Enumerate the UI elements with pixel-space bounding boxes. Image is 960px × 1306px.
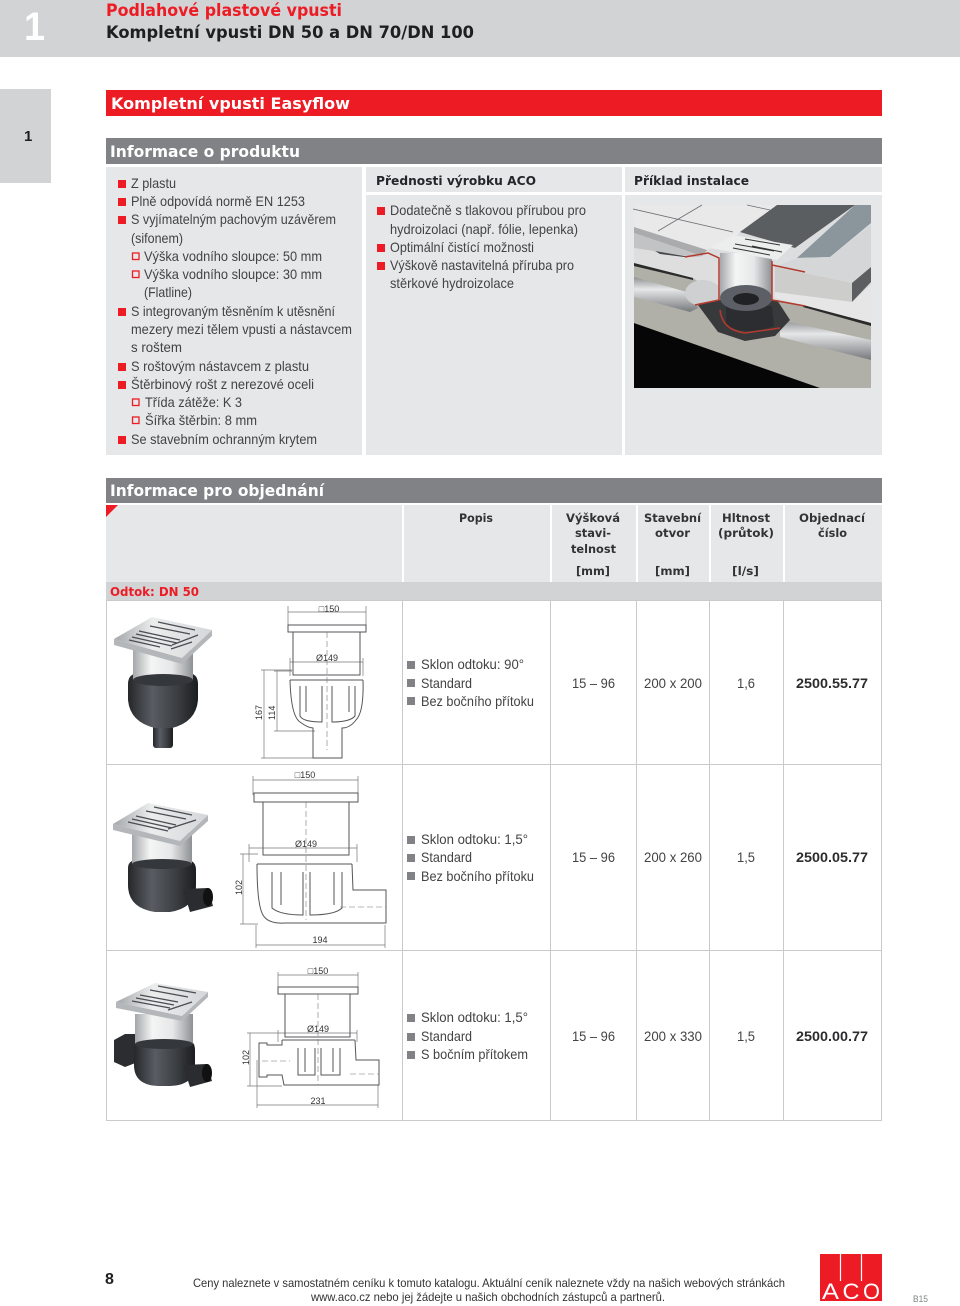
- side tab: [0, 89, 51, 183]
- row 2 description: Bez bočního přítoku: [421, 868, 534, 884]
- row 1 description: Bez bočního přítoku: [421, 693, 534, 709]
- technical drawing 1: 114: [267, 706, 277, 720]
- panel: ACO advantages: Výškově nastavitelná příruba pro: [390, 257, 574, 273]
- panel: ACO advantages: hydroizolaci (např. fólie, lepenka): [390, 221, 578, 237]
- technical drawing 3: [241, 966, 379, 1108]
- row 1 values: 1,6: [737, 675, 755, 691]
- technical drawing 3: 102: [241, 1050, 251, 1065]
- row 2 description: [407, 831, 534, 884]
- ACO logo: [820, 1254, 882, 1304]
- product photo 3: [114, 983, 212, 1087]
- row 1 values: 2500.55.77: [796, 675, 868, 691]
- order table header: Objednací: [799, 511, 866, 525]
- panel: ACO advantages: Dodatečně s tlakovou přírubou pro: [390, 202, 586, 218]
- footer note: Ceny naleznete v samostatném ceníku k tomuto katalogu. Aktuální ceník naleznete vždy na našich webových stránkách: [193, 1276, 785, 1290]
- row 2 values: 2500.05.77: [796, 849, 868, 865]
- panel: product features: (sifonem): [131, 230, 183, 246]
- panel: ACO advantages: [366, 167, 622, 455]
- order table header: Stavební: [644, 511, 702, 525]
- installation illustration: [633, 205, 871, 388]
- row 2 description: Sklon odtoku: 1,5°: [421, 831, 528, 847]
- row 3 values: 200 x 330: [644, 1028, 702, 1044]
- panel: product features: Z plastu: [131, 175, 176, 191]
- order info heading: [106, 478, 882, 503]
- row 3 values: [572, 1028, 868, 1044]
- technical drawing 3: 231: [310, 1096, 326, 1106]
- red corner marker: [106, 505, 118, 517]
- row 3 values: 15 – 96: [572, 1028, 615, 1044]
- row 3 values: 1,5: [737, 1028, 755, 1044]
- row 3 description: Standard: [421, 1028, 472, 1044]
- panel: product features: S integrovaným těsněním k utěsnění: [131, 303, 335, 319]
- order table header: [l/s]: [732, 564, 759, 578]
- technical drawing 2: 102: [234, 880, 244, 895]
- row 3 values: 2500.00.77: [796, 1028, 868, 1044]
- row 1 description: [407, 656, 534, 709]
- technical drawing 3: □150: [308, 966, 328, 976]
- panel: product features: mezery mezi tělem vpusti a nástavcem: [131, 321, 352, 337]
- red title bar: [106, 90, 882, 116]
- ACO logo: C: [842, 1279, 860, 1304]
- drain size band: [106, 582, 882, 600]
- chapter title: Podlahové plastové vpusti: [106, 1, 342, 20]
- row 1 values: 200 x 200: [644, 675, 702, 691]
- row 2 values: [572, 849, 868, 865]
- panel: product features: Šířka štěrbin: 8 mm: [145, 412, 257, 428]
- technical drawing 1: Ø149: [316, 653, 338, 663]
- order info heading: Informace pro objednání: [110, 481, 325, 500]
- panel: product features: Výška vodního sloupce: 30 mm: [144, 266, 322, 282]
- red title bar: Kompletní vpusti Easyflow: [111, 94, 350, 113]
- row 1 description: Sklon odtoku: 90°: [421, 656, 524, 672]
- panel: product features: Se stavebním ochranným krytem: [131, 431, 317, 447]
- panel: ACO advantages: Přednosti výrobku ACO: [376, 173, 536, 188]
- product photo 2: [113, 803, 213, 912]
- technical drawing 2: Ø149: [295, 839, 317, 849]
- top header band: [0, 0, 960, 57]
- row 3 description: S bočním přítokem: [421, 1046, 528, 1062]
- order table header: Popis: [459, 511, 493, 525]
- product photo 1: [114, 617, 212, 748]
- panel: ACO advantages: stěrkové hydroizolace: [390, 275, 514, 291]
- row 2 values: 1,5: [737, 849, 755, 865]
- row 2 description: Standard: [421, 849, 472, 865]
- row 3 description: [407, 1009, 528, 1062]
- row 1 values: [572, 675, 868, 691]
- footer note: www.aco.cz nebo jej žádejte u našich obchodních zástupců a partnerů.: [310, 1290, 665, 1304]
- row 3 description: Sklon odtoku: 1,5°: [421, 1009, 528, 1025]
- row 2 values: 200 x 260: [644, 849, 702, 865]
- order table header: Výšková: [566, 511, 620, 525]
- side tab: 1: [24, 128, 32, 145]
- panel: product features: Štěrbinový rošt z nerezové oceli: [131, 376, 314, 392]
- row 1 description: Standard: [421, 675, 472, 691]
- panel: installation example: [625, 167, 882, 455]
- panel: product features: Plně odpovídá normě EN 1253: [131, 193, 305, 209]
- ACO logo: A: [822, 1279, 839, 1304]
- technical drawing 2: 194: [312, 935, 328, 945]
- technical drawing 1: □150: [319, 604, 339, 614]
- order table header: telnost: [571, 542, 616, 556]
- technical drawing 1: [254, 604, 366, 758]
- page number: 8: [105, 1271, 114, 1288]
- order table header: stavi-: [575, 526, 611, 540]
- panel: product features: Výška vodního sloupce: 50 mm: [144, 248, 322, 264]
- ACO logo: O: [863, 1279, 880, 1304]
- catalog code: B15: [913, 1294, 928, 1304]
- chapter number: 1: [24, 5, 45, 49]
- technical drawing 3: Ø149: [307, 1024, 329, 1034]
- product info heading: [106, 138, 882, 164]
- order table header: číslo: [818, 526, 847, 540]
- panel: ACO advantages: Optimální čistící možnosti: [390, 239, 534, 255]
- row 1 values: 15 – 96: [572, 675, 615, 691]
- order table header: (průtok): [718, 526, 774, 540]
- panel: product features: S vyjímatelným pachovým uzávěrem: [131, 211, 336, 227]
- technical drawing 1: 167: [254, 705, 264, 720]
- order table header: otvor: [655, 526, 690, 540]
- panel: product features: [106, 167, 362, 455]
- footer note: [193, 1276, 785, 1304]
- panel: product features: Třída zátěže: K 3: [145, 394, 242, 410]
- order table header: [mm]: [576, 564, 610, 578]
- technical drawing 2: [234, 770, 386, 948]
- order table header: [106, 505, 882, 582]
- panel: product features: (Flatline): [144, 284, 192, 300]
- row 2 values: 15 – 96: [572, 849, 615, 865]
- table grid: [106, 600, 882, 1120]
- panel: installation example: Příklad instalace: [634, 173, 749, 188]
- drain size band: Odtok: DN 50: [110, 584, 199, 599]
- order table header: [mm]: [655, 564, 690, 578]
- panel: product features: s roštem: [131, 339, 182, 355]
- order table header: Hltnost: [722, 511, 771, 525]
- product info heading: Informace o produktu: [110, 142, 300, 161]
- panel: product features: S roštovým nástavcem z plastu: [131, 358, 309, 374]
- chapter subtitle: Kompletní vpusti DN 50 a DN 70/DN 100: [106, 23, 474, 42]
- technical drawing 2: □150: [295, 770, 315, 780]
